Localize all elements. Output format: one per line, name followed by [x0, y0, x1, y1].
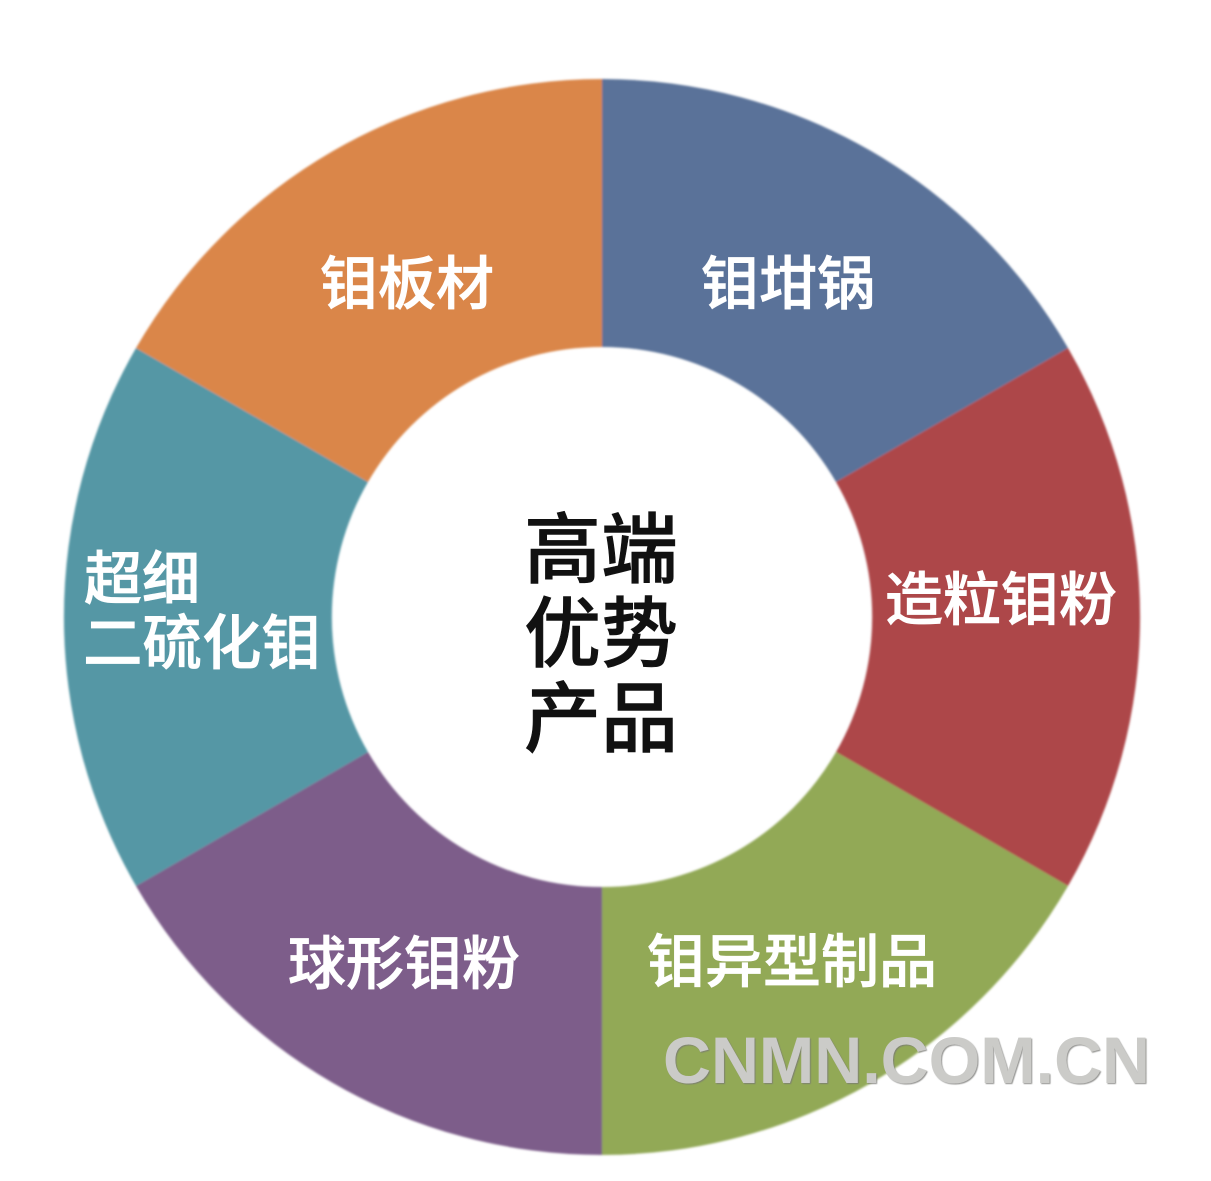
watermark: CNMN.COM.CN	[663, 1023, 1150, 1097]
center title: 产品	[524, 677, 678, 763]
segment: teal	[64, 348, 368, 886]
segment: purple	[136, 752, 602, 1155]
segment: orange	[136, 79, 602, 482]
label: 钼板材: 钼板材	[320, 252, 494, 317]
label: 超细二硫化钼: 超细	[84, 547, 200, 612]
center title: 优势	[524, 592, 678, 678]
label: 钼异型制品: 钼异型制品	[647, 930, 937, 995]
label: 钼坩锅: 钼坩锅	[701, 252, 875, 317]
segment: blue	[602, 79, 1068, 482]
label: 球形钼粉: 球形钼粉	[288, 932, 520, 997]
segment: red	[836, 348, 1140, 886]
label: 造粒钼粉: 造粒钼粉	[885, 568, 1117, 633]
center title	[524, 508, 678, 763]
center title: 高端	[524, 508, 678, 594]
label: 超细二硫化钼: 二硫化钼	[83, 610, 321, 677]
segment: green	[602, 752, 1068, 1155]
label: 超细二硫化钼	[83, 547, 321, 677]
